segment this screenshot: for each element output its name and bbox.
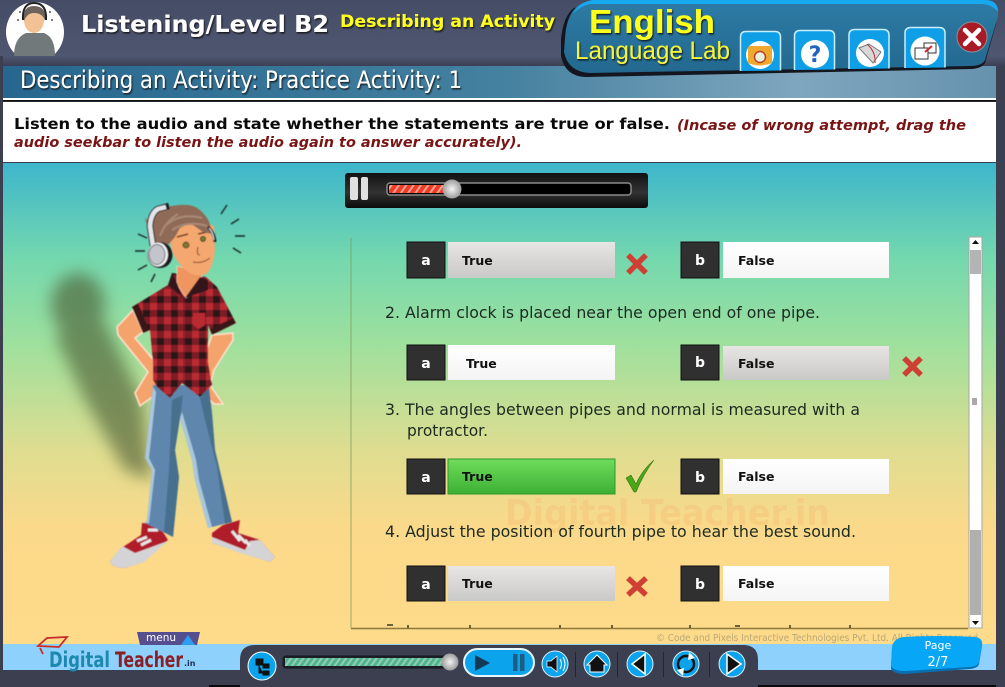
label: Language Lab: Language Lab	[575, 37, 730, 65]
question panel	[351, 237, 982, 628]
row: question 4 answers	[407, 566, 889, 601]
sound lines	[135, 205, 245, 282]
icon: next	[719, 651, 745, 677]
subtitle bar: Describing an Activity: Practice Activity: 1	[20, 66, 462, 94]
bottom strip	[0, 644, 1005, 687]
top header bar	[0, 0, 1005, 66]
row: question 1 answers: True	[462, 253, 493, 268]
icon tab: help	[794, 30, 834, 70]
icon: cross	[630, 580, 644, 593]
icon: site map	[248, 652, 276, 680]
right shoe	[212, 520, 275, 562]
row: question 2 answers: b	[695, 355, 705, 371]
page indicator: Page	[925, 639, 952, 652]
icon tab: history folder	[740, 32, 780, 71]
heading: level: Listening/Level B2	[81, 12, 329, 38]
English Language Lab panel	[561, 0, 998, 77]
instructions: (Incase of wrong attempt, drag the	[677, 118, 966, 134]
row: question 3 answers: a	[421, 470, 431, 486]
row: question 3 answers: False	[738, 469, 774, 484]
question 3: protractor.	[407, 421, 488, 440]
hair	[145, 205, 212, 246]
icon: close button	[957, 22, 987, 52]
row: question 2 answers: False	[738, 356, 774, 371]
instructions: Listen to the audio and state whether the statements are true or false.	[14, 115, 670, 133]
instructions: audio seekbar to listen the audio again to answer accurately).	[14, 135, 522, 151]
icon: cross	[630, 257, 644, 271]
play and pause pill	[464, 649, 534, 676]
row: question 1 answers: b	[695, 253, 705, 269]
row: question 1 answers: False	[738, 253, 774, 268]
question 4: 4. Adjust the position of fourth pipe to hear the best sound.	[385, 522, 856, 541]
row: question 3 answers: b	[695, 470, 705, 486]
menu tab: menu	[146, 632, 176, 644]
icon: student avatar	[6, 2, 64, 62]
icon: replay	[673, 651, 699, 677]
icon tab: help: ?	[809, 43, 821, 68]
neck	[177, 266, 202, 298]
page indicator	[891, 636, 982, 674]
row: question 4 answers: b	[695, 577, 705, 593]
activity background	[3, 163, 996, 644]
row: question 1 answers: a	[421, 253, 431, 269]
logo: Digital Teacher: .in	[184, 659, 196, 668]
logo: Digital Teacher: Teacher	[115, 648, 183, 672]
seek bar	[283, 654, 458, 670]
row: question 4 answers: True	[462, 576, 493, 591]
watermark: Digital Teacher.in	[505, 493, 830, 534]
question 3: 3. The angles between pipes and normal is measured with a	[385, 400, 860, 419]
collar	[168, 273, 208, 298]
cut-off next question line	[387, 625, 850, 628]
scrollbar	[969, 237, 982, 628]
row: question 3 answers	[407, 459, 889, 494]
question 2: 2. Alarm clock is placed near the open end of one pipe.	[385, 303, 820, 322]
row: question 2 answers	[407, 345, 919, 380]
row: question 1 answers	[407, 242, 889, 278]
heading: topic: Describing an Activity	[340, 12, 555, 32]
icon: volume	[542, 651, 568, 677]
head	[168, 216, 215, 275]
subtitle bar	[3, 66, 996, 102]
copyright: © Code and Pixels Interactive Technologies Pvt. Ltd. All Rights Reserved.	[656, 633, 981, 644]
row: question 4 answers: a	[421, 577, 431, 593]
row: question 3 answers: True	[462, 469, 493, 484]
shirt	[131, 272, 236, 398]
illustration: boy with headphones	[110, 205, 275, 568]
left shoe	[110, 523, 168, 568]
arms	[117, 310, 158, 406]
icon tab: window resize	[905, 28, 945, 68]
page indicator: 2/7	[928, 655, 948, 670]
icon: check mark	[626, 460, 654, 492]
instructions	[3, 102, 996, 162]
row: question 2 answers: True	[466, 356, 497, 371]
character shadow	[51, 273, 152, 480]
audio player	[345, 173, 648, 208]
logo: Digital Teacher	[38, 637, 196, 672]
headphones	[150, 206, 169, 246]
label: English: English	[589, 3, 715, 40]
frame edges	[0, 56, 3, 687]
icon tab: book	[849, 30, 889, 69]
menu tab	[137, 632, 200, 645]
logo: Digital Teacher: Digital	[49, 648, 110, 672]
jeans	[145, 385, 232, 537]
icon: cross	[906, 360, 919, 373]
icon: home	[584, 651, 610, 677]
icon: previous	[627, 651, 653, 677]
row: question 4 answers: False	[738, 576, 774, 591]
control bar	[240, 645, 758, 687]
row: question 2 answers: a	[421, 356, 431, 372]
question 3	[385, 400, 860, 440]
